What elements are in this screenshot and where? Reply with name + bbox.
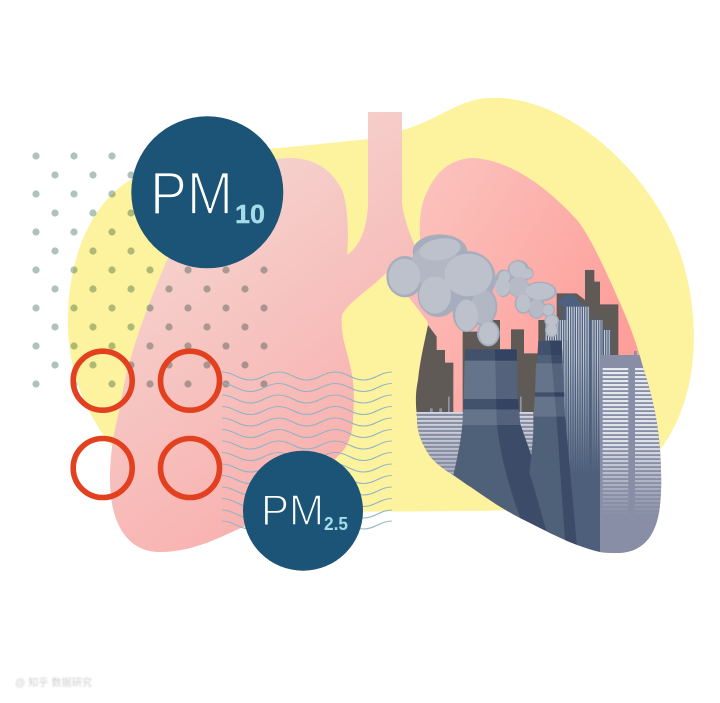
smoke clouds	[386, 234, 559, 346]
yellow background blob	[68, 98, 694, 512]
background skyline	[413, 270, 618, 487]
wave lines	[222, 372, 392, 529]
watermark: @ 知乎 数据研究	[15, 676, 92, 689]
large smoke cloud	[386, 234, 500, 346]
low striped building centre	[519, 396, 534, 456]
small smoke cloud	[495, 260, 559, 337]
low striped building left	[413, 397, 463, 482]
right lung	[416, 158, 661, 553]
red rings	[73, 351, 220, 498]
PM2.5 badge: 2.5	[324, 514, 348, 534]
city skyline inside right lung	[413, 270, 670, 557]
PM2.5 badge: PM	[261, 486, 324, 535]
left lung and trachea	[110, 112, 445, 552]
right striped building	[600, 351, 662, 553]
PM10 badge: 10	[235, 199, 265, 229]
cooling tower small	[529, 341, 577, 550]
PM10 badge	[131, 116, 283, 268]
cooling tower large	[453, 349, 557, 547]
tall striped tower	[545, 293, 611, 557]
dot pattern	[32, 152, 268, 388]
PM10 badge: PM	[150, 160, 233, 227]
PM2.5 badge	[243, 451, 363, 571]
